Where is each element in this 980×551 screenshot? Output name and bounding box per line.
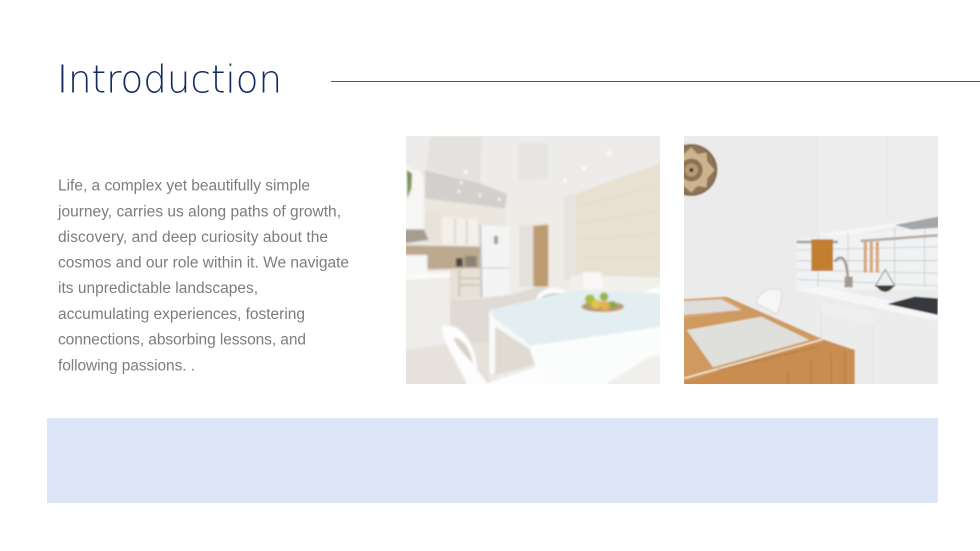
light blue banner panel xyxy=(47,418,938,503)
photo: white kitchen with wooden table xyxy=(684,136,938,384)
body text block xyxy=(57,178,349,374)
photo: bright kitchen and dining room xyxy=(406,136,660,384)
body text block: cosmos and our role within it. We navigate xyxy=(58,254,349,272)
body text block: following passions. . xyxy=(58,358,195,374)
body text block: journey, carries us along paths of growth, xyxy=(57,204,341,220)
title rule line xyxy=(331,81,980,82)
body text block: connections, absorbing lessons, and xyxy=(58,332,306,348)
body text block: accumulating experiences, fostering xyxy=(58,306,305,323)
body text block: Life, a complex yet beautifully simple xyxy=(58,178,310,194)
title: Introduction xyxy=(57,58,282,102)
body text block: discovery, and deep curiosity about the xyxy=(58,229,328,246)
body text block: its unpredictable landscapes, xyxy=(58,280,258,297)
